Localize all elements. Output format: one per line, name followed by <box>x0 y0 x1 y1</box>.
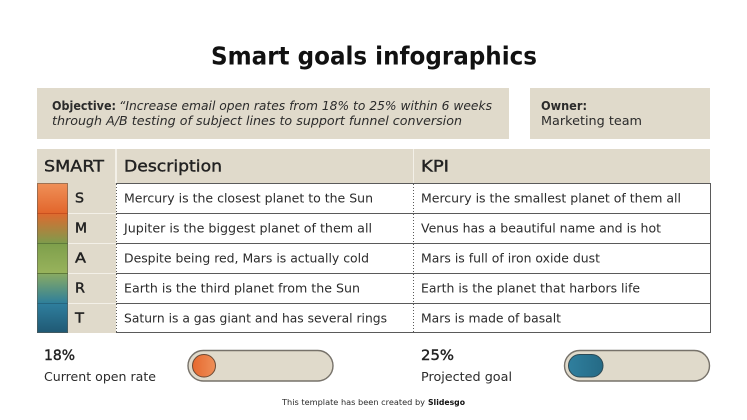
row: A <box>75 250 600 266</box>
row: S: S <box>75 192 84 206</box>
owner text: Marketing team <box>541 113 642 128</box>
owner text <box>541 98 642 128</box>
footer credit: This template has been created by <box>281 398 426 407</box>
row: T: T <box>74 312 84 326</box>
row: M: M <box>75 222 87 236</box>
owner text: Owner: <box>541 98 587 113</box>
row: T: Mars is made of basalt <box>421 310 561 326</box>
row: R: R <box>75 282 85 296</box>
metric: projected goal <box>421 348 512 384</box>
table header: Description <box>124 156 222 176</box>
table header: SMART <box>44 156 104 176</box>
gradient column <box>37 183 68 333</box>
row: S <box>75 190 681 206</box>
row: R: Earth is the third planet from the Sun <box>124 280 360 296</box>
progress bar: 18% <box>188 350 333 381</box>
row: S: Mercury is the smallest planet of them all <box>421 190 681 206</box>
footer credit: Slidesgo <box>428 398 465 407</box>
table: SMART goals <box>37 149 710 333</box>
row: M: Venus has a beautiful name and is hot <box>421 220 661 236</box>
row: T: Saturn is a gas giant and has several rings <box>124 310 387 326</box>
row: R <box>75 280 640 296</box>
row: T <box>74 310 561 326</box>
metric: projected goal: Projected goal <box>421 369 512 384</box>
row: A: A <box>75 252 86 266</box>
row: S: Mercury is the closest planet to the Sun <box>124 190 373 206</box>
objective text: “Increase email open rates from 18% to 25% within 6 weeks <box>119 98 492 113</box>
grid lines <box>116 184 710 333</box>
metric: current open rate: Current open rate <box>44 369 156 384</box>
table header: KPI <box>421 156 449 176</box>
panel: owner <box>530 88 710 139</box>
objective text: through A/B testing of subject lines to support funnel conversion <box>52 113 462 128</box>
progress bar: 25% <box>564 350 710 381</box>
metric: current open rate <box>44 348 156 384</box>
table header <box>37 149 710 183</box>
panel: objective <box>37 88 509 139</box>
letter column background <box>68 183 116 333</box>
title: Smart goals infographics <box>211 42 537 70</box>
row: R: Earth is the planet that harbors life <box>421 280 640 296</box>
metric: current open rate: 18% <box>44 348 75 364</box>
objective text: Objective: <box>52 98 116 113</box>
row: A: Despite being red, Mars is actually cold <box>124 250 369 266</box>
row: A: Mars is full of iron oxide dust <box>421 250 600 266</box>
metric: projected goal: 25% <box>421 348 454 364</box>
row: M: Jupiter is the biggest planet of them all <box>123 220 372 236</box>
row: M <box>75 220 661 236</box>
objective text <box>52 98 492 128</box>
